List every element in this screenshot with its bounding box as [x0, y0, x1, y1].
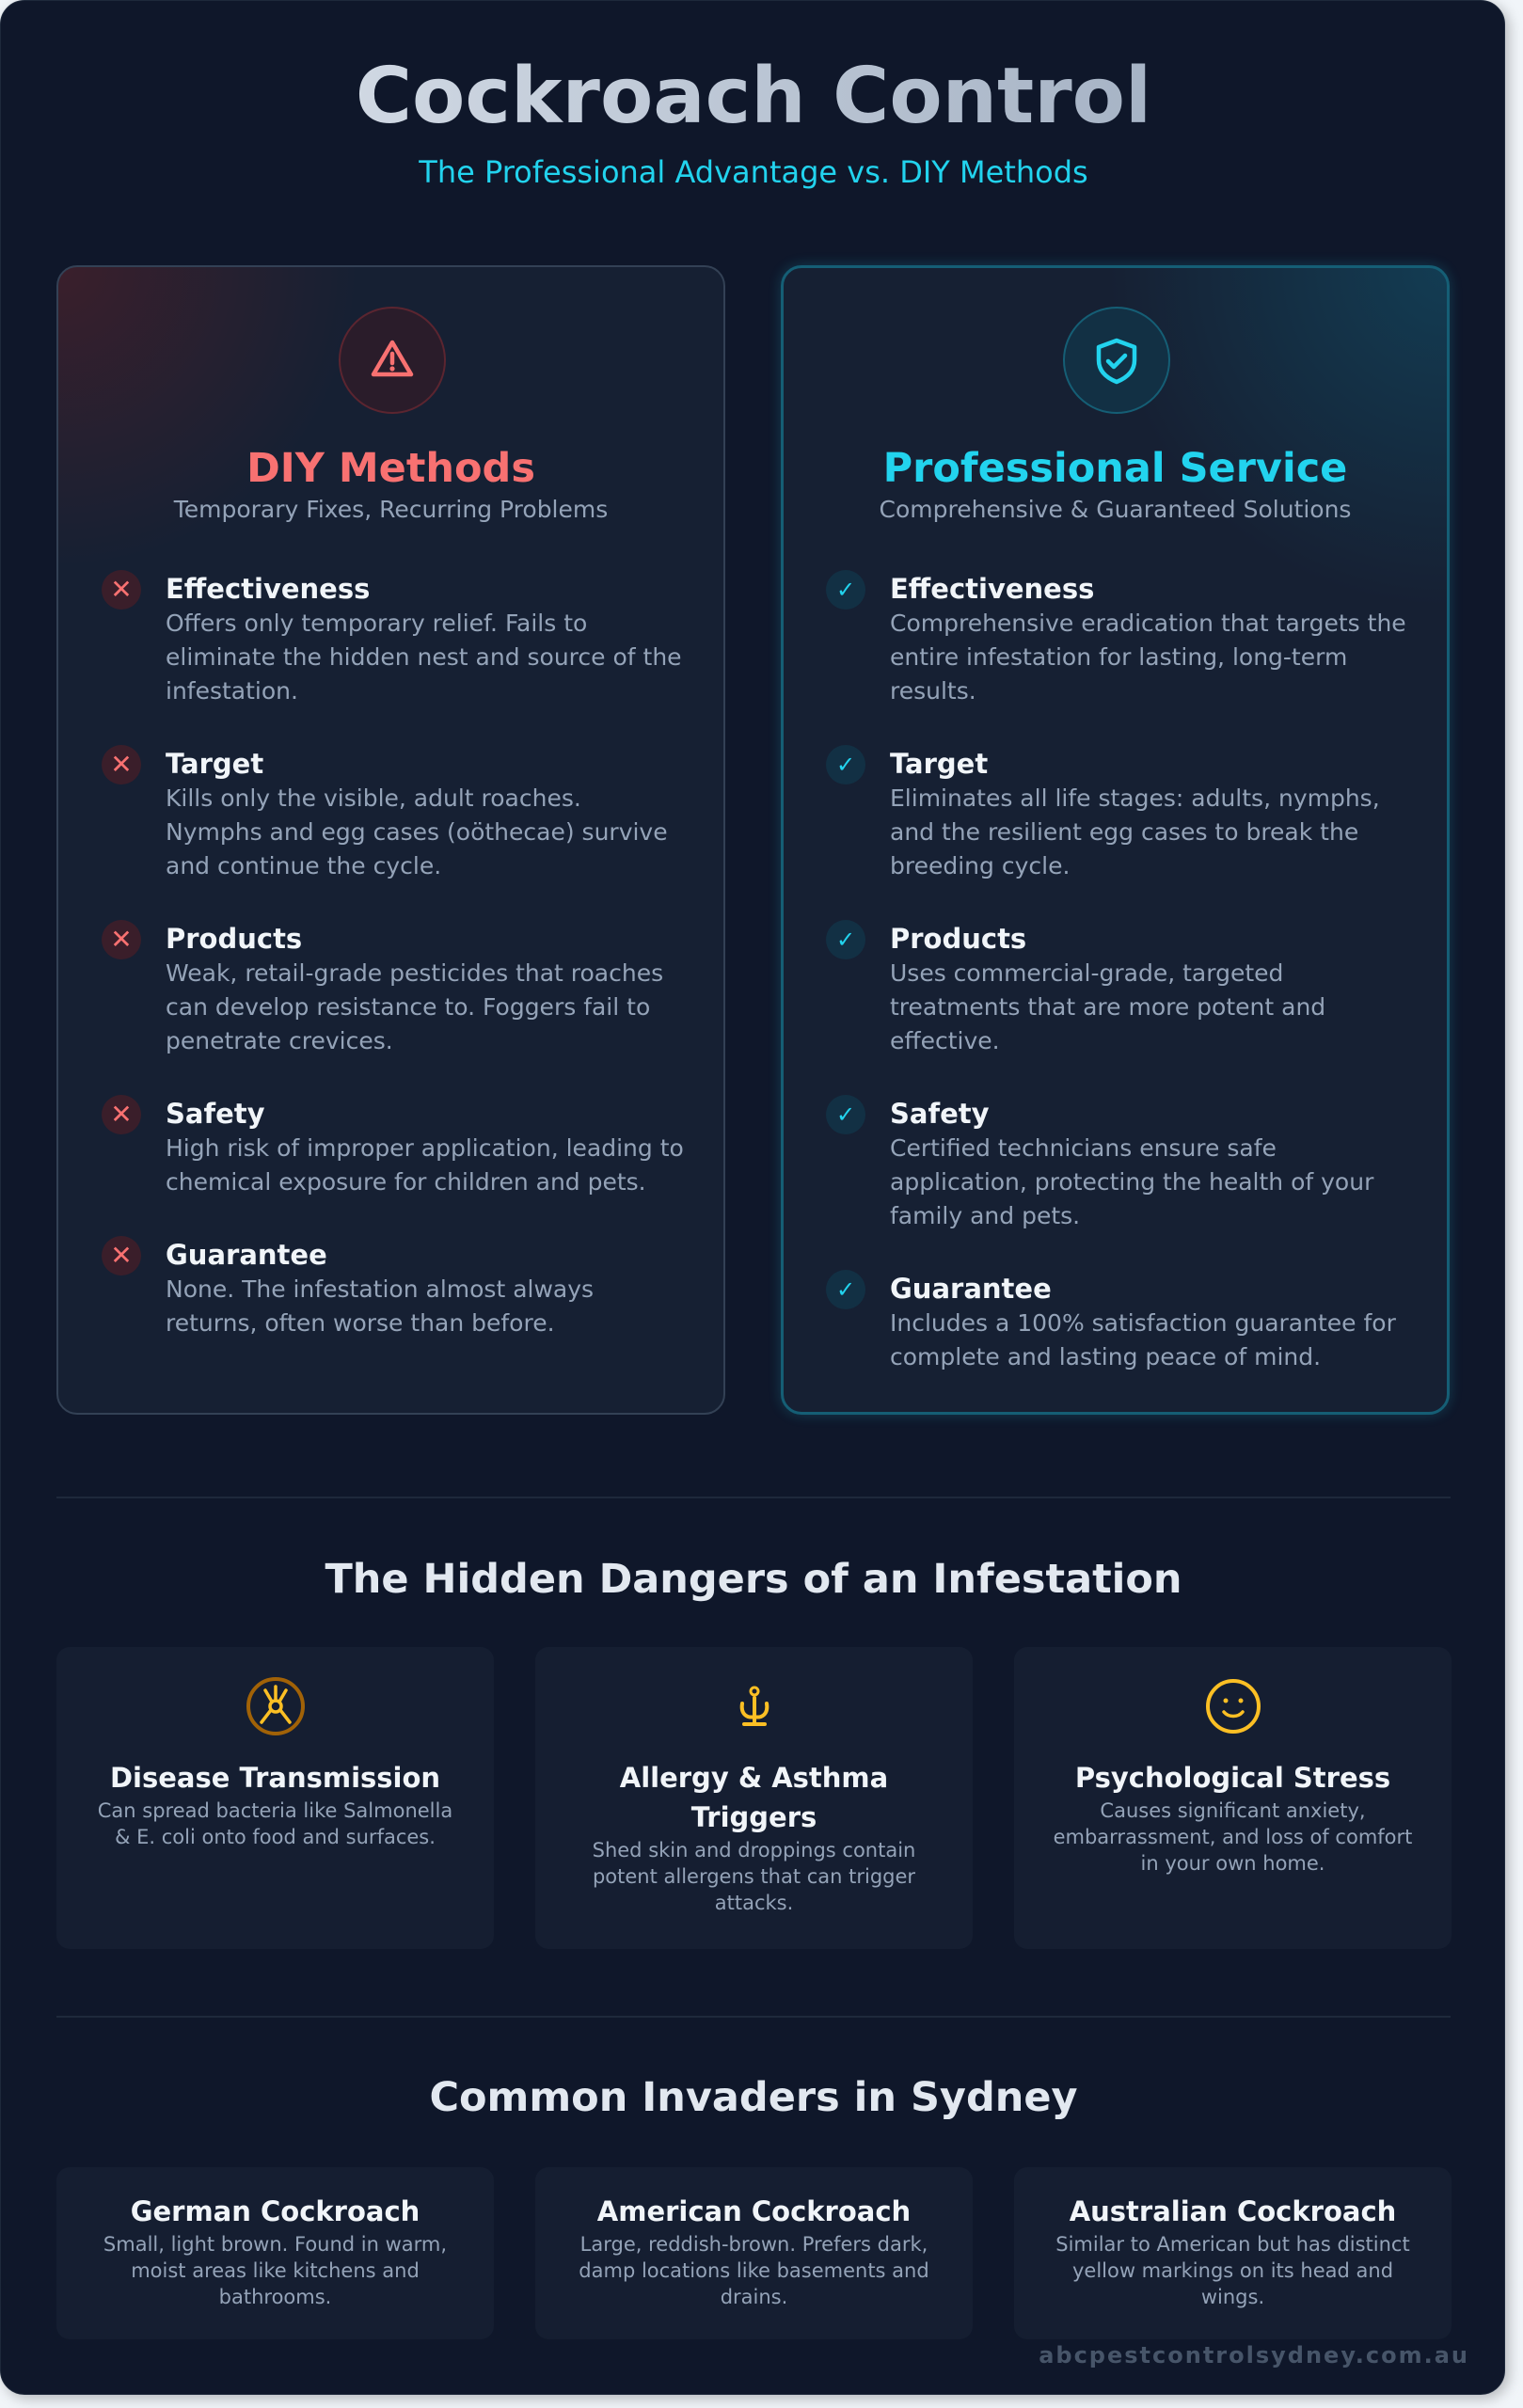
item: safety: ✓ [836, 1101, 855, 1128]
text: Causes significant anxiety, embarrassment, and loss of comfort in your own home. [1054, 1799, 1412, 1875]
item: effectiveness: Comprehensive eradication that targets the entire infestation for lasting, long-term results. [890, 610, 1406, 705]
item: target: ✓ [836, 752, 855, 778]
item: guarantee: Guarantee [166, 1239, 327, 1271]
title: Australian Cockroach [1070, 2195, 1396, 2227]
icon: shield [1063, 307, 1170, 414]
item: target [826, 745, 1380, 879]
list: DIY drawbacks [102, 570, 684, 1337]
card: disease transmission [56, 1647, 494, 1949]
title: Psychological Stress [1075, 1762, 1390, 1794]
title: Allergy & Asthma Triggers [620, 1762, 888, 1833]
subheading: Comprehensive & Guaranteed Solutions [880, 496, 1351, 523]
item: guarantee [826, 1270, 1396, 1370]
item: safety: Safety [890, 1098, 990, 1130]
icon: warning [339, 307, 446, 414]
item: products: Uses commercial-grade, targeted treatments that are more potent and effective. [890, 959, 1325, 1054]
text: Shed skin and droppings contain potent allergens that can trigger attacks. [593, 1839, 915, 1914]
item: target: Eliminates all life stages: adults, nymphs, and the resilient egg cases to break the breeding cycle. [890, 784, 1380, 879]
item: safety [826, 1095, 1373, 1229]
panel: DIY methods [56, 265, 725, 1415]
icon: lungs [739, 1686, 769, 1726]
icon: biohazard [246, 1677, 305, 1735]
item: guarantee: None. The infestation almost always returns, often worse than before. [166, 1275, 594, 1337]
card: allergy [535, 1647, 973, 1949]
title: Cockroach Control [356, 52, 1151, 141]
item: effectiveness: Effectiveness [890, 573, 1094, 605]
heading: common invaders: Common Invaders in Sydney [429, 2074, 1078, 2121]
item: products: ✕ [110, 924, 133, 955]
title [1, 48, 1506, 146]
item: guarantee: ✓ [836, 1276, 855, 1303]
item: effectiveness: ✕ [110, 574, 133, 605]
subtitle: The Professional Advantage vs. DIY Methods [419, 154, 1088, 190]
item: safety: High risk of improper application, leading to chemical exposure for children and pets. [166, 1134, 684, 1196]
subheading: Temporary Fixes, Recurring Problems [174, 496, 608, 523]
item: guarantee: ✕ [110, 1240, 133, 1271]
item: safety: ✕ [110, 1099, 133, 1130]
item: effectiveness: Offers only temporary relief. Fails to eliminate the hidden nest and source of the infestation. [166, 610, 682, 705]
title: German Cockroach [131, 2195, 420, 2227]
list: professional benefits [826, 570, 1406, 1370]
text: Similar to American but has distinct yellow markings on its head and wings. [1055, 2233, 1410, 2308]
heading: Professional Service [883, 445, 1347, 492]
footer url: abcpestcontrolsydney.com.au [1039, 2342, 1469, 2368]
card: Australian cockroach [1014, 2167, 1452, 2339]
item: effectiveness: ✓ [836, 577, 855, 603]
item: guarantee: Guarantee [890, 1273, 1052, 1305]
item: target [102, 745, 668, 879]
item: safety [102, 1095, 684, 1196]
title: Disease Transmission [110, 1762, 440, 1794]
item: guarantee: Includes a 100% satisfaction guarantee for complete and lasting peace of mind. [890, 1309, 1396, 1370]
panel: professional service [781, 265, 1450, 1415]
icon: face [1206, 1679, 1261, 1734]
item: effectiveness [826, 570, 1406, 705]
card: psychological stress [1014, 1647, 1452, 1949]
item: products: Weak, retail-grade pesticides that roaches can develop resistance to. Foggers fail to penetrate crevices. [166, 959, 663, 1054]
card: American cockroach [535, 2167, 973, 2339]
heading: hidden dangers: The Hidden Dangers of an Infestation [325, 1556, 1182, 1603]
text: Large, reddish-brown. Prefers dark, damp locations like basements and drains. [579, 2233, 929, 2308]
item: target: Target [890, 748, 988, 780]
item: products: ✓ [836, 927, 855, 953]
item: target: Kills only the visible, adult roaches. Nymphs and egg cases (oöthecae) survive and continue the cycle. [166, 784, 668, 879]
item: safety: Safety [166, 1098, 265, 1130]
item: products [826, 920, 1325, 1054]
item: effectiveness [102, 570, 682, 705]
card: German cockroach [56, 2167, 494, 2339]
item: target: ✕ [110, 749, 133, 780]
item: safety: Certified technicians ensure safe application, protecting the health of your family and pets. [890, 1134, 1373, 1229]
item: effectiveness: Effectiveness [166, 573, 370, 605]
title: American Cockroach [597, 2195, 911, 2227]
text: Small, light brown. Found in warm, moist areas like kitchens and bathrooms. [103, 2233, 447, 2308]
heading: DIY Methods [246, 445, 535, 492]
item: products: Products [166, 923, 302, 955]
item: guarantee [102, 1236, 594, 1337]
item: target: Target [166, 748, 263, 780]
item: products [102, 920, 663, 1054]
text: Can spread bacteria like Salmonella & E. coli onto food and surfaces. [98, 1799, 452, 1848]
item: products: Products [890, 923, 1026, 955]
